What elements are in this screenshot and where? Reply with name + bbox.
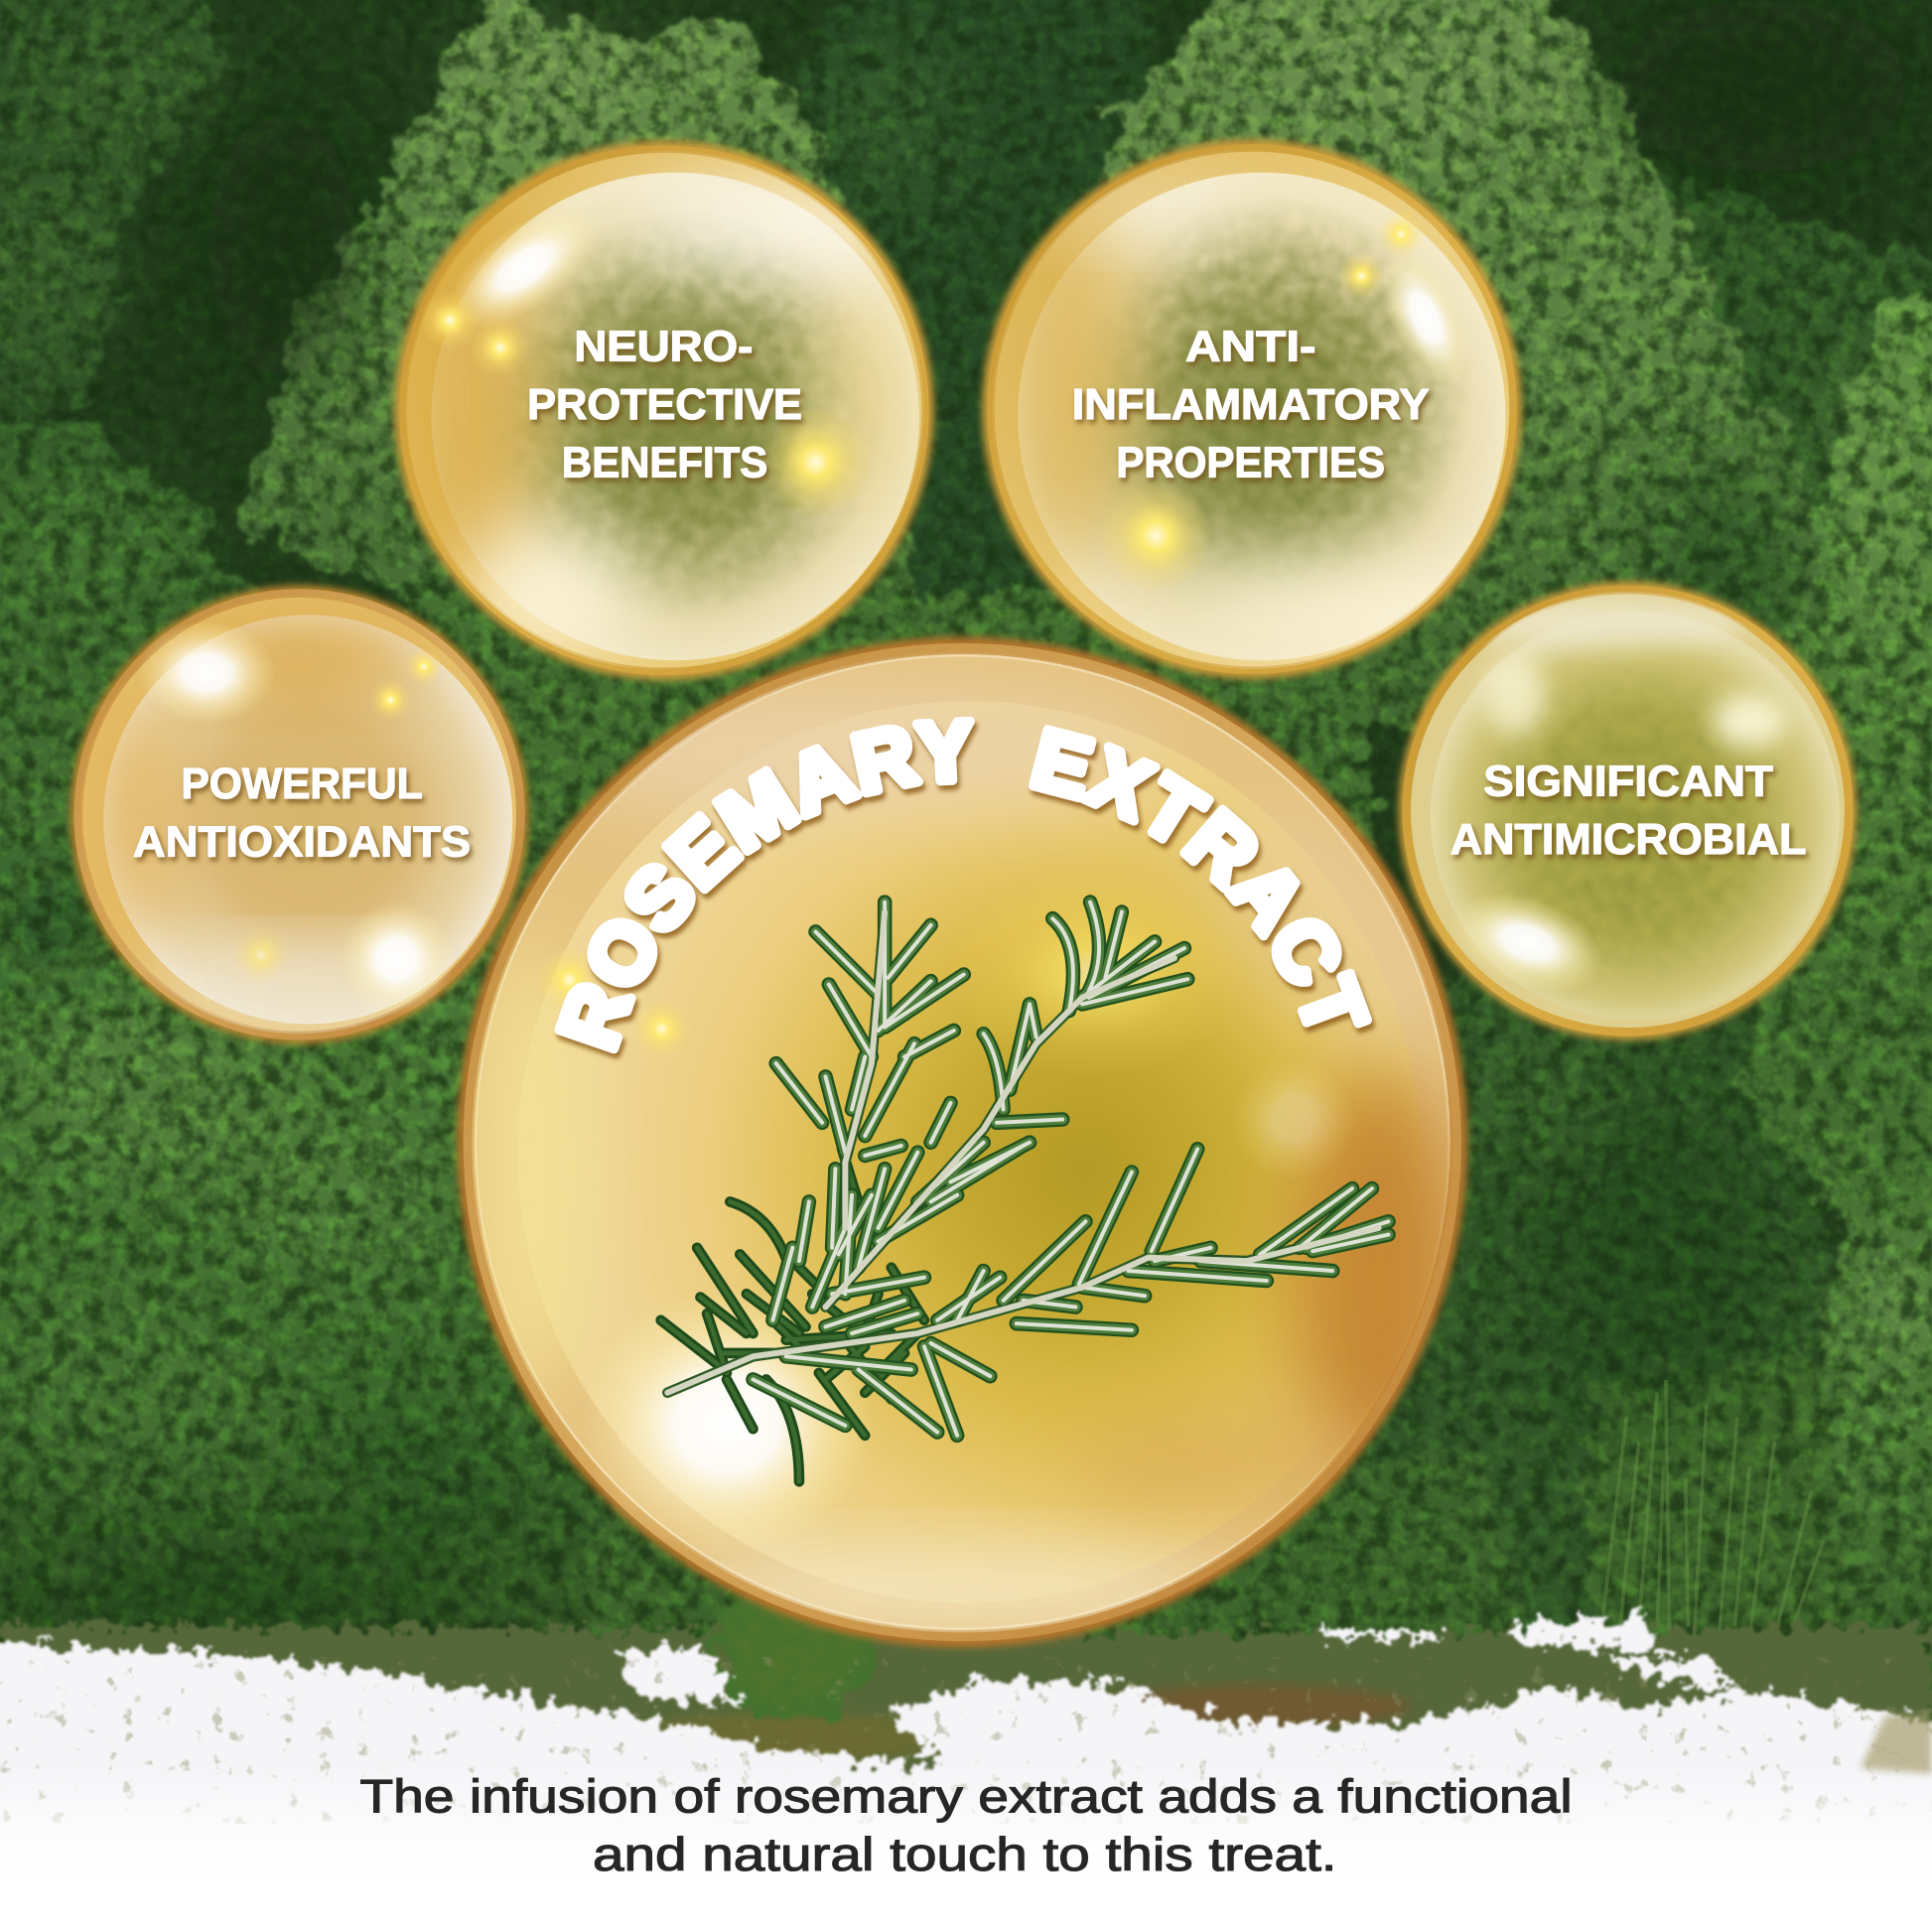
label: anti-inflammatory properties: [1072, 324, 1430, 486]
label: neuro-protective benefits: NEURO-: [574, 324, 753, 371]
label: powerful antioxidants: [133, 760, 471, 867]
icon: rosemary sprig: [661, 902, 1389, 1481]
label: significant antimicrobial: ANTIMICROBIAL: [1450, 816, 1806, 864]
label: significant antimicrobial: [1450, 759, 1806, 864]
label: significant antimicrobial: SIGNIFICANT: [1483, 759, 1773, 806]
label: anti-inflammatory properties: PROPERTIES: [1116, 439, 1385, 486]
caption: The infusion of rosemary extract adds a functional: [359, 1770, 1573, 1823]
bubble: anti-inflammatory properties: [982, 139, 1522, 679]
main bubble: rosemary extract: [452, 631, 1473, 1652]
bubble: significant antimicrobial: [1399, 582, 1857, 1039]
label: neuro-protective benefits: PROTECTIVE: [527, 381, 802, 429]
caption: and natural touch to this treat.: [593, 1828, 1337, 1880]
label: neuro-protective benefits: [527, 324, 802, 486]
label: anti-inflammatory properties: INFLAMMATORY: [1072, 381, 1430, 429]
label: neuro-protective benefits: BENEFITS: [562, 439, 767, 486]
heading: rosemary extract: ROSEMARY EXTRACT: [554, 717, 1378, 1061]
label: anti-inflammatory properties: ANTI-: [1185, 324, 1315, 371]
label: powerful antioxidants: POWERFUL: [181, 760, 423, 808]
bubble: powerful antioxidants: [70, 586, 528, 1043]
snowy ground: [0, 1575, 1932, 1932]
label: powerful antioxidants: ANTIOXIDANTS: [133, 819, 471, 867]
caption: [359, 1770, 1573, 1880]
bubble: neuro-protective benefits: [388, 140, 934, 680]
